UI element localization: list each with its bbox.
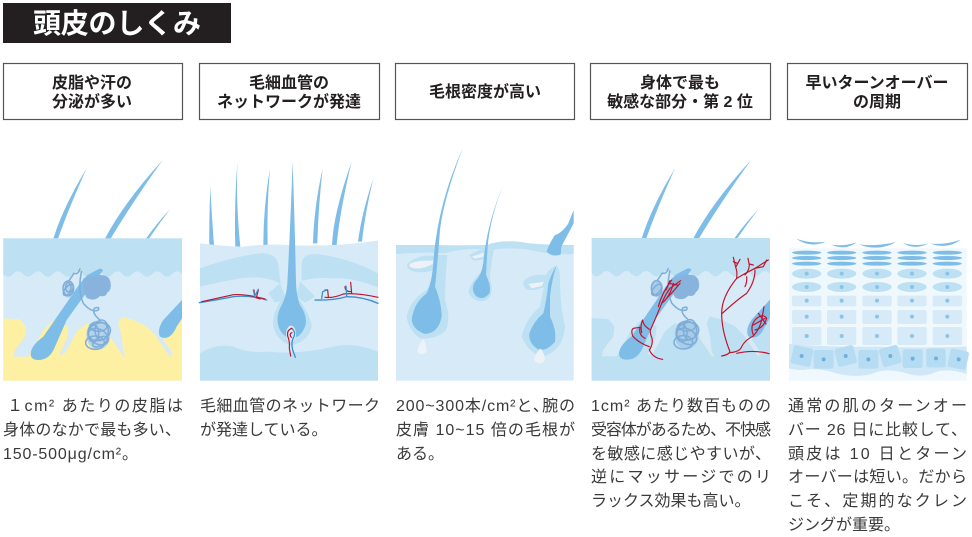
text: sebum: 150-500μg/cm²。	[3, 446, 138, 463]
illustration: sebaceous and sweat glands	[3, 160, 182, 381]
heading: capillary network	[200, 64, 380, 120]
text: follicle density: 200~300本/cm²と､腕の	[396, 397, 575, 415]
text: sensitivity: ラックス効果も高い。	[591, 492, 751, 510]
text: turnover: 通常の肌のターンオー	[788, 397, 967, 415]
heading: sensitive area: 身体で最も	[640, 74, 720, 92]
nerve fibres	[632, 257, 769, 359]
text: sensitivity: 逆にマッサージでのリ	[591, 468, 771, 486]
shedding flakes	[796, 239, 961, 248]
text: sebum: １cm² あたりの皮脂は	[7, 397, 183, 415]
text: capillaries: が発達している。	[200, 421, 328, 439]
heading: sebum and sweat: 分泌が多い	[52, 92, 132, 111]
text: sensitivity: 受容体があるため、不快感	[591, 421, 771, 439]
text: sebum: 身体のなかで最も多い、	[3, 421, 181, 439]
title: 頭皮のしくみ	[33, 8, 201, 39]
text: capillaries	[200, 397, 380, 439]
text: turnover	[788, 397, 967, 534]
text: follicle density: ある。	[396, 445, 444, 463]
heading: fast turnover: の周期	[853, 93, 901, 111]
text: sebum	[3, 397, 183, 463]
text: follicle density: 皮膚 10~15 倍の毛根が	[396, 421, 575, 439]
text: turnover: 頭皮は 10 日とターン	[788, 445, 967, 463]
illustration: sensitive receptors and nerves	[592, 160, 770, 381]
heading: sebum and sweat: 皮脂や汗の	[52, 74, 132, 92]
heading: sensitive area: 敏感な部分・第 2 位	[607, 92, 753, 111]
text: turnover: こそ、定期的なクレン	[788, 492, 967, 510]
oval cell rows	[792, 269, 962, 292]
heading: capillary network: 毛細血管の	[249, 73, 329, 92]
heading: capillary network: ネットワークが発達	[217, 92, 361, 111]
rectangular cell rows	[792, 296, 962, 345]
text: turnover: バー 26 日に比較して、	[788, 421, 967, 439]
heading: sebum and sweat	[4, 64, 182, 120]
title	[3, 3, 231, 43]
flat cell rows	[792, 251, 962, 266]
text: capillaries: 毛細血管のネットワーク	[200, 397, 380, 415]
heading: follicle density	[396, 64, 574, 120]
basal layer	[789, 344, 967, 376]
heading: fast turnover	[788, 64, 968, 120]
heading: fast turnover: 早いターンオーバー	[805, 74, 949, 92]
nuclei	[805, 272, 949, 338]
text: follicle density	[396, 397, 575, 463]
text: sensitivity: を敏感に感じやすいが、	[591, 445, 771, 463]
text: turnover: オーバーは短い。だから	[788, 468, 967, 486]
illustration: dense hair follicles	[396, 148, 574, 381]
text: sensitivity: 1cm² あたり数百ものの	[591, 397, 771, 415]
heading: follicle density: 毛根密度が高い	[429, 82, 541, 101]
illustration: capillary network	[199, 162, 378, 381]
text: sensitivity	[591, 397, 771, 510]
text: turnover: ジングが重要。	[788, 516, 900, 534]
heading: sensitive area	[590, 64, 770, 120]
illustration: skin turnover layers	[789, 239, 969, 381]
